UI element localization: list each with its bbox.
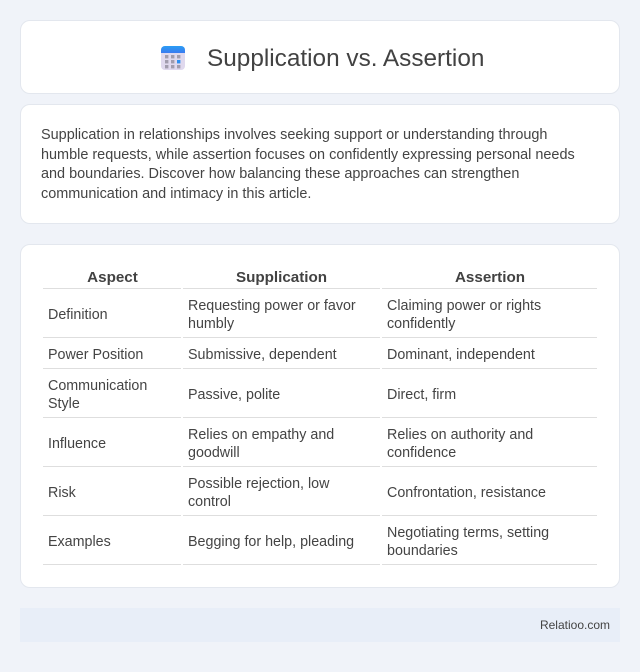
row: power position: Submissive, dependent (188, 347, 337, 363)
intro text: Supplication in relationships involves seeking support or understanding through (41, 127, 547, 143)
intro text: humble requests, while assertion focuses on confidently expressing personal needs (41, 147, 575, 163)
row: risk: Confrontation, resistance (387, 485, 546, 501)
row: communication style (48, 378, 456, 412)
column headers: Aspect (87, 269, 138, 286)
row: definition: Claiming power or rights (387, 298, 541, 314)
row: definition: Definition (48, 307, 108, 323)
row: definition: confidently (387, 316, 455, 332)
column headers (87, 269, 525, 286)
row: power position (48, 347, 535, 363)
row: influence: confidence (387, 445, 456, 461)
comparison table (43, 269, 597, 565)
row: examples: boundaries (387, 543, 458, 559)
row: influence: Relies on authority and (387, 427, 533, 443)
row: power position: Power Position (48, 347, 143, 363)
intro text: communication and intimacy in this article. (41, 186, 311, 202)
row: power position: Dominant, independent (387, 347, 535, 363)
column headers: Supplication (236, 269, 327, 286)
row: definition: Requesting power or favor (188, 298, 356, 314)
row: communication style: Communication (48, 378, 147, 394)
comparison table panel (20, 244, 620, 588)
intro panel (20, 104, 620, 224)
row: risk (48, 476, 546, 510)
row: risk: Risk (48, 485, 76, 501)
row: examples: Begging for help, pleading (188, 534, 354, 550)
row: examples: Examples (48, 534, 111, 550)
row: influence: Influence (48, 436, 106, 452)
row: communication style: Direct, firm (387, 387, 456, 403)
title: Supplication vs. Assertion (207, 45, 484, 72)
footer credit: Relatioo.com (540, 618, 610, 632)
row: influence: Relies on empathy and (188, 427, 334, 443)
footer bar (20, 608, 620, 642)
row: examples: Negotiating terms, setting (387, 525, 549, 541)
row: risk: control (188, 494, 231, 510)
row: risk: Possible rejection, low (188, 476, 329, 492)
row: communication style: Style (48, 396, 80, 412)
row: influence: goodwill (188, 445, 240, 461)
row: examples (48, 525, 549, 559)
row: communication style: Passive, polite (188, 387, 280, 403)
intro text (41, 127, 575, 202)
row: definition (48, 298, 541, 332)
icon: calendar (161, 46, 185, 70)
header panel (20, 20, 620, 94)
intro text: and boundaries. Discover how balancing these approaches can strengthen (41, 166, 519, 182)
row: influence (48, 427, 533, 461)
row: definition: humbly (188, 316, 234, 332)
column headers: Assertion (455, 269, 525, 286)
